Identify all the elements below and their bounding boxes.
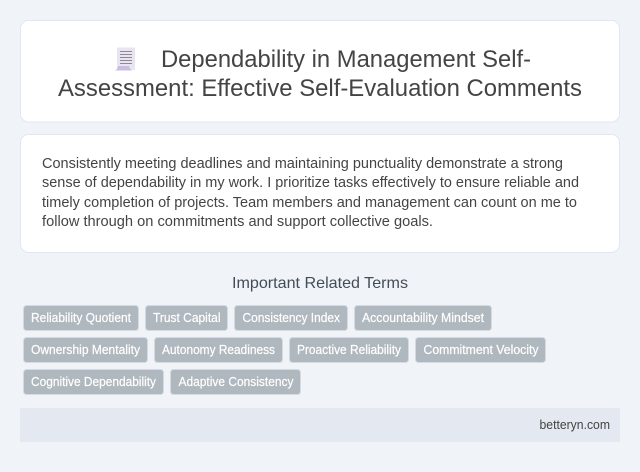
text block: description: Consistently meeting deadlines and maintaining punctuality demonstrate a strong [42,156,563,172]
tag: Reliability Quotient [24,306,138,330]
text block: description: follow through on commitments and support collective goals. [42,214,433,230]
icon: document scroll [115,48,135,70]
tag: Commitment Velocity [416,338,546,362]
text block: description: sense of dependability in my work. I prioritize tasks effectively to ensure reliable and [42,175,579,191]
heading: related terms: Important Related Terms [232,275,408,292]
tag: Ownership Mentality: Ownership Mentality [31,343,141,357]
footer: site name: betteryn.com [540,418,610,432]
tag: Commitment Velocity: Commitment Velocity [424,343,539,357]
tag: Proactive Reliability: Proactive Reliability [297,343,402,357]
text block: description [42,156,579,230]
text block: description: timely completion of projects. Team members and management can count on me to [42,195,577,211]
tag: Autonomy Readiness [154,338,282,362]
tag: Consistency Index: Consistency Index [242,311,341,325]
tag: Accountability Mindset [354,306,492,330]
tag: Reliability Quotient: Reliability Quotient [31,311,132,325]
tag: Adaptive Consistency [170,370,300,394]
title [58,46,582,102]
tag: Ownership Mentality [24,338,148,362]
tag: Trust Capital [146,306,228,330]
tag: Accountability Mindset: Accountability Mindset [362,311,485,325]
tag: Autonomy Readiness: Autonomy Readiness [162,343,275,357]
footer [20,408,620,442]
title: Assessment: Effective Self-Evaluation Comments [58,75,582,102]
panel: description [20,134,620,252]
title: Dependability in Management Self- [161,46,531,73]
tags: related terms [24,306,546,394]
tag: Adaptive Consistency: Adaptive Consistency [178,375,294,389]
tag: Cognitive Dependability [24,370,164,394]
panel: title card [20,20,620,122]
tag: Proactive Reliability [290,338,408,362]
tag: Cognitive Dependability: Cognitive Dependability [31,375,157,389]
tag: Trust Capital: Trust Capital [153,311,220,325]
tag: Consistency Index [234,306,348,330]
